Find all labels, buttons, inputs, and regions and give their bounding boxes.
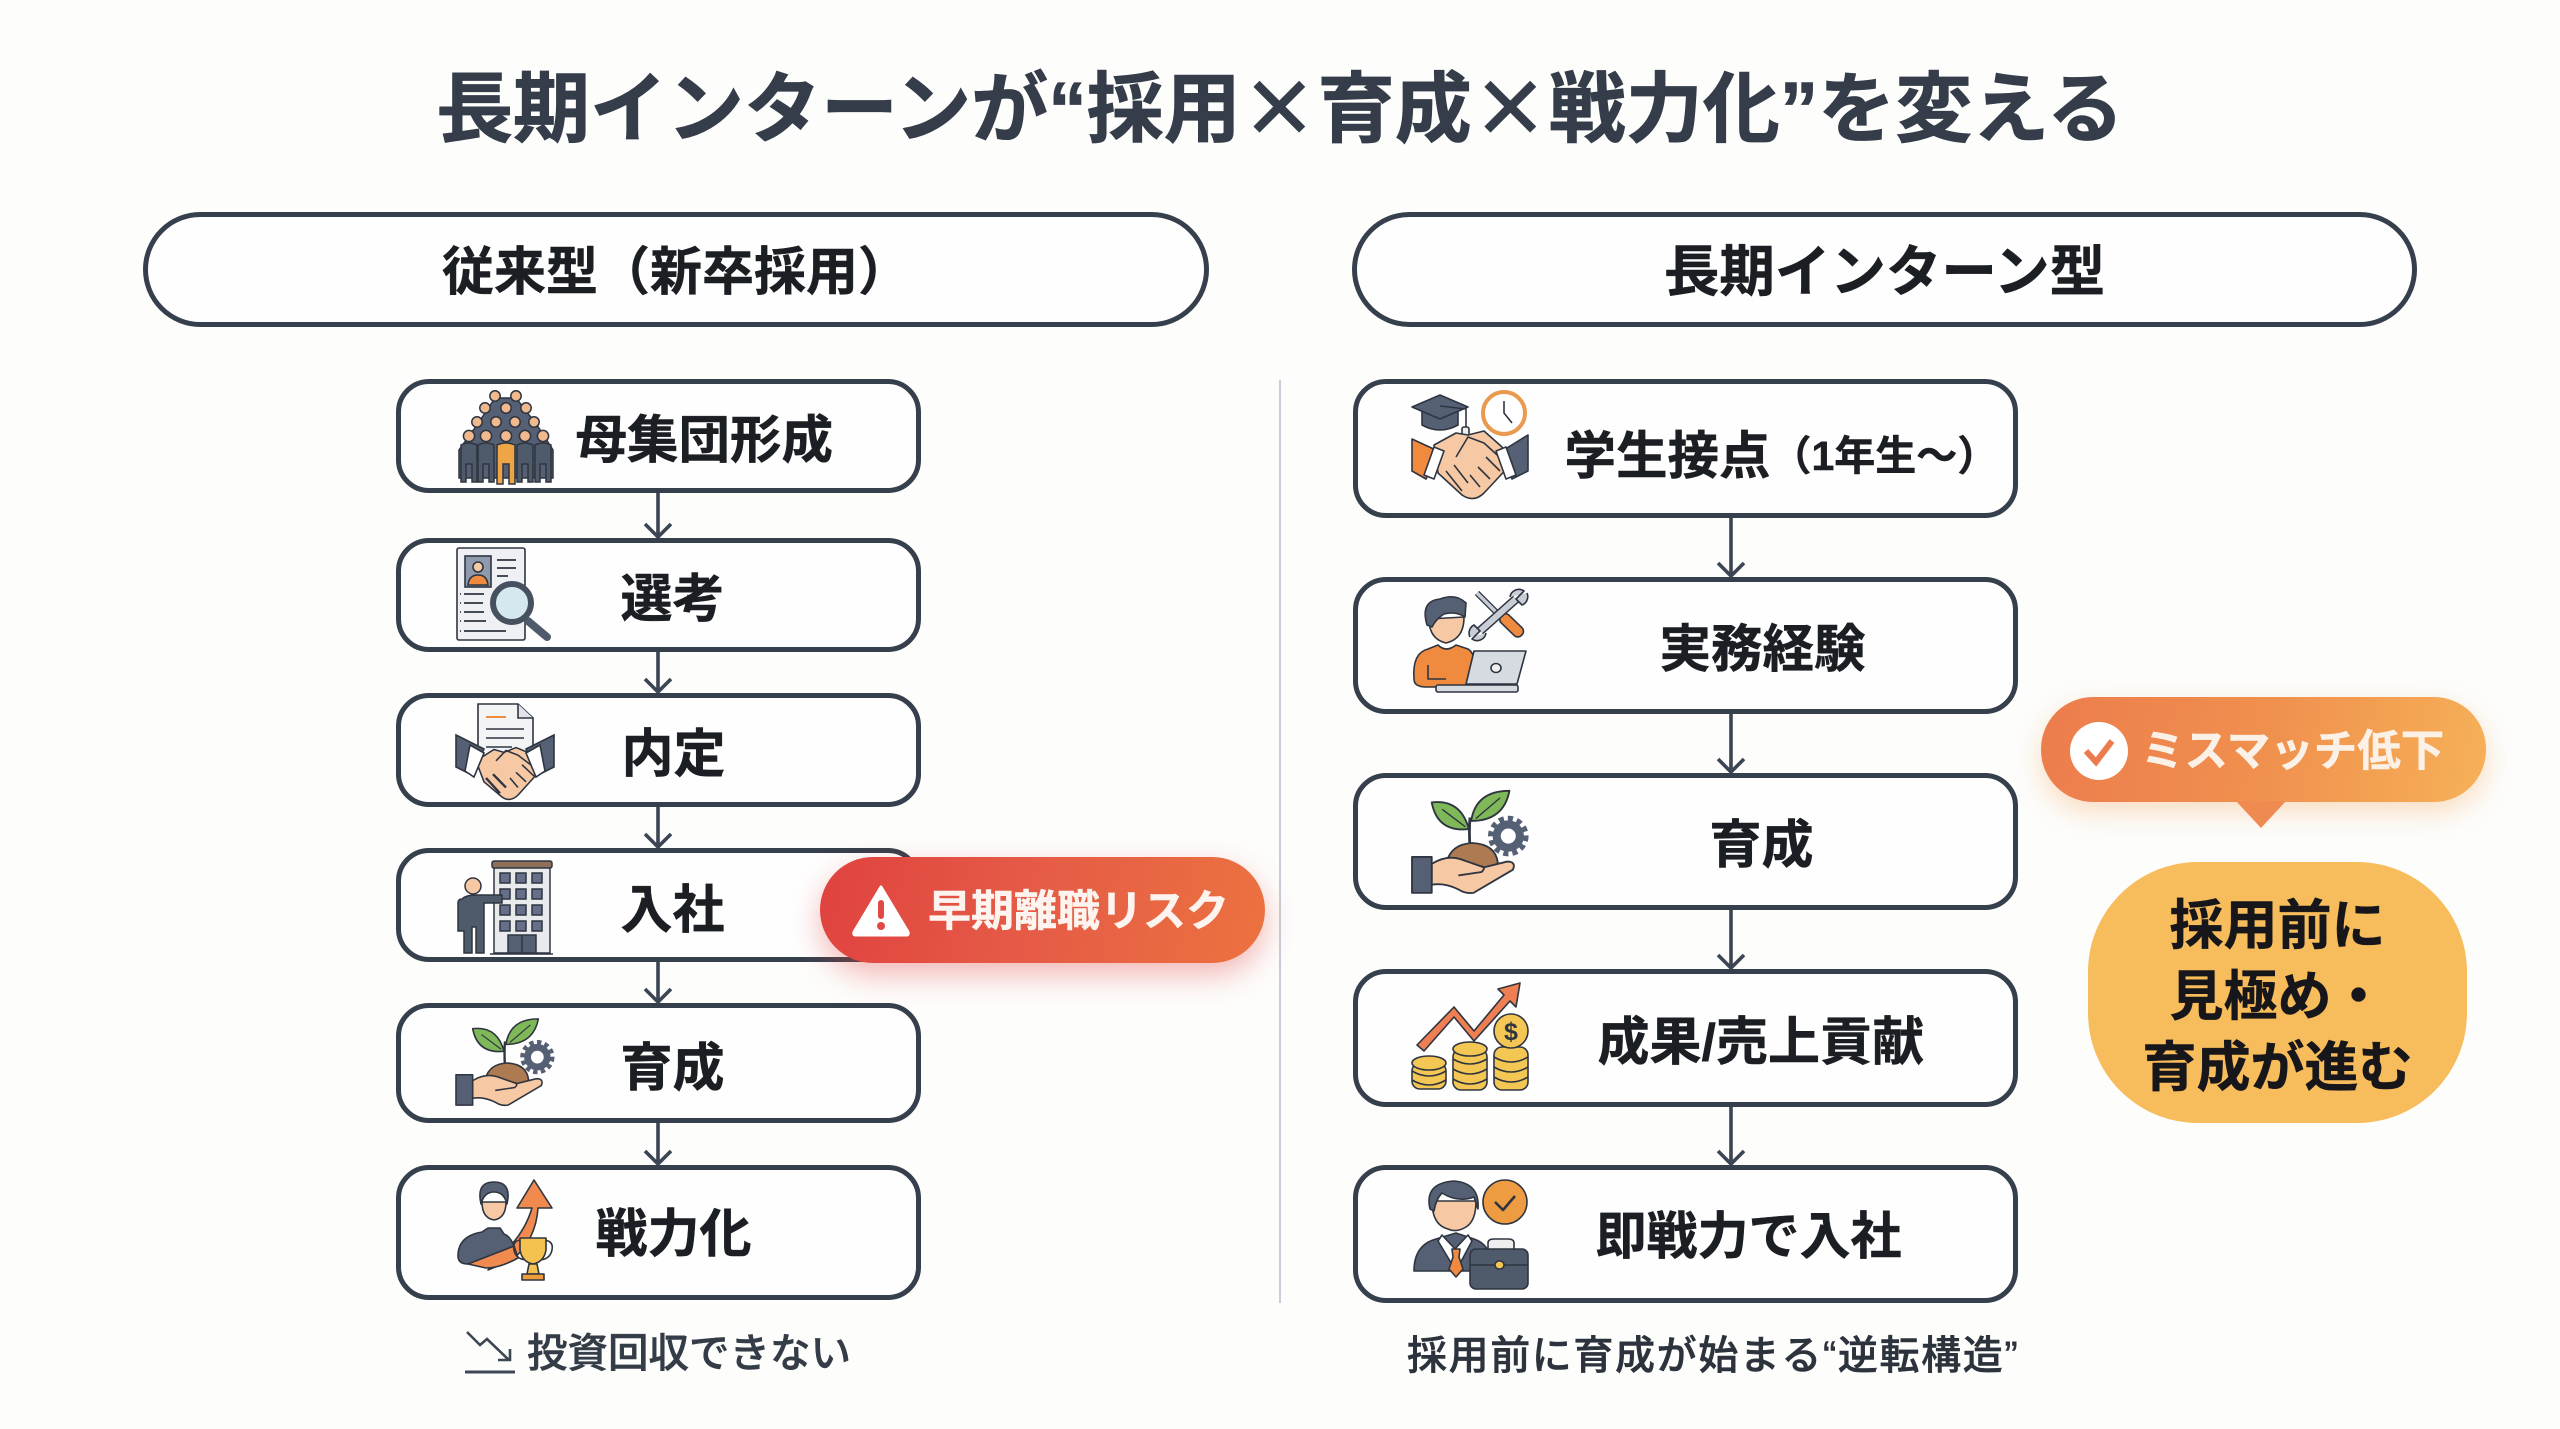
icon: cap, clock, handshake — [1411, 390, 1529, 500]
step: 内定: 内定 — [622, 726, 726, 784]
icon: person, arrow and trophy — [457, 1179, 554, 1281]
divider — [1279, 380, 1281, 1303]
title: 長期インターンが“採用×育成×戦力化”を変える — [436, 48, 2124, 159]
icon: businessman with briefcase — [1413, 1179, 1529, 1290]
caption: reverse structure: 採用前に育成が始まる“逆転構造” — [1407, 1334, 2019, 1378]
icon: contract handshake — [455, 703, 555, 800]
arrow 4 — [644, 962, 672, 1003]
step: 戦力化: 戦力化 — [596, 1206, 752, 1264]
step: 内定 — [396, 693, 920, 807]
step: 成果/売上貢献 — [1352, 969, 2018, 1107]
icon: plant in hand — [1411, 790, 1529, 894]
step: 成果/売上貢献: 成果/売上貢献 — [1598, 1014, 1924, 1072]
callout pill — [2041, 697, 2486, 802]
step: 即戦力で入社 — [1352, 1165, 2018, 1303]
step: 母集団形成: 母集団形成 — [576, 411, 833, 469]
note bubble — [2088, 862, 2467, 1123]
icon: person and office building — [457, 860, 553, 955]
icon: check circle — [2070, 722, 2128, 780]
icon: warning triangle — [852, 885, 910, 936]
step: 戦力化 — [396, 1165, 920, 1300]
icon: worker with laptop and tools — [1412, 588, 1529, 693]
step: 学生接点 — [1352, 379, 2018, 518]
icon: declining trend — [465, 1331, 515, 1374]
arrow 1 — [644, 493, 672, 538]
arrow 3 — [644, 807, 672, 848]
arrow 5 — [644, 1123, 672, 1165]
note text: 採用前に — [2170, 896, 2386, 956]
callout pointer — [2236, 801, 2286, 828]
caption text: 投資回収できない — [527, 1330, 851, 1376]
arrow 2 — [644, 652, 672, 693]
step: 母集団形成 — [396, 379, 920, 493]
step: 選考: 選考 — [620, 571, 725, 629]
callout: early turnover risk — [820, 857, 1265, 963]
callout text: 早期離職リスク — [928, 888, 1229, 936]
icon: growth chart and coins: $ — [1504, 1018, 1518, 1046]
caption: investment not recovered — [465, 1330, 851, 1376]
step: 育成: 育成 — [1710, 817, 1814, 875]
step: 選考 — [396, 538, 920, 652]
step: 育成 — [1352, 773, 2018, 910]
arrow R3 — [1716, 910, 1746, 969]
step: 実務経験 — [1352, 577, 2018, 714]
icon: resume and magnifier — [456, 547, 551, 641]
arrow R1 — [1716, 518, 1746, 577]
note text — [2142, 896, 2412, 1098]
icon: growth chart and coins — [1411, 982, 1529, 1091]
note text: 育成が進む — [2142, 1038, 2412, 1098]
arrow R4 — [1716, 1107, 1746, 1165]
step sublabel: （1年生～） — [1770, 433, 1998, 479]
icon: crowd — [458, 390, 554, 485]
step label: 学生接点 — [1564, 427, 1771, 485]
icon: plant in hand — [455, 1018, 554, 1106]
arrow R2 — [1716, 714, 1746, 773]
header: traditional: 従来型（新卒採用） — [442, 244, 910, 302]
callout text: ミスマッチ低下 — [2141, 728, 2444, 776]
step: 入社 — [396, 848, 920, 962]
callout: mismatch reduction — [2028, 692, 2500, 828]
step: 即戦力で入社: 即戦力で入社 — [1596, 1208, 1902, 1265]
step: 育成: 育成 — [620, 1040, 725, 1098]
step: 育成 — [396, 1003, 920, 1123]
step: 実務経験: 実務経験 — [1660, 620, 1866, 678]
note text: 見極め・ — [2170, 967, 2386, 1027]
header: traditional — [143, 212, 1209, 327]
header: long-term internship: 長期インターン型 — [1664, 241, 2105, 303]
header: long-term internship — [1352, 212, 2417, 327]
step: 入社: 入社 — [620, 882, 725, 940]
